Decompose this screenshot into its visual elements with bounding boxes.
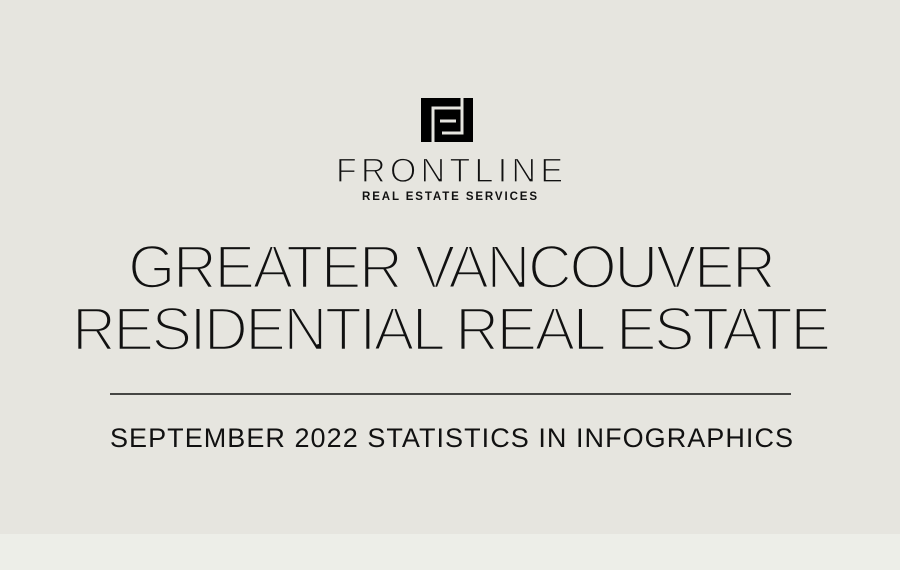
title: RESIDENTIAL REAL ESTATE	[72, 295, 831, 363]
title	[72, 233, 831, 363]
logo	[336, 98, 563, 203]
subtitle: SEPTEMBER 2022 STATISTICS IN INFOGRAPHICS	[110, 423, 793, 453]
title: GREATER VANCOUVER	[128, 233, 776, 301]
brand name: FRONTLINE	[336, 152, 563, 190]
brand tagline: REAL ESTATE SERVICES	[362, 191, 537, 203]
icon: logo mark	[421, 98, 473, 142]
